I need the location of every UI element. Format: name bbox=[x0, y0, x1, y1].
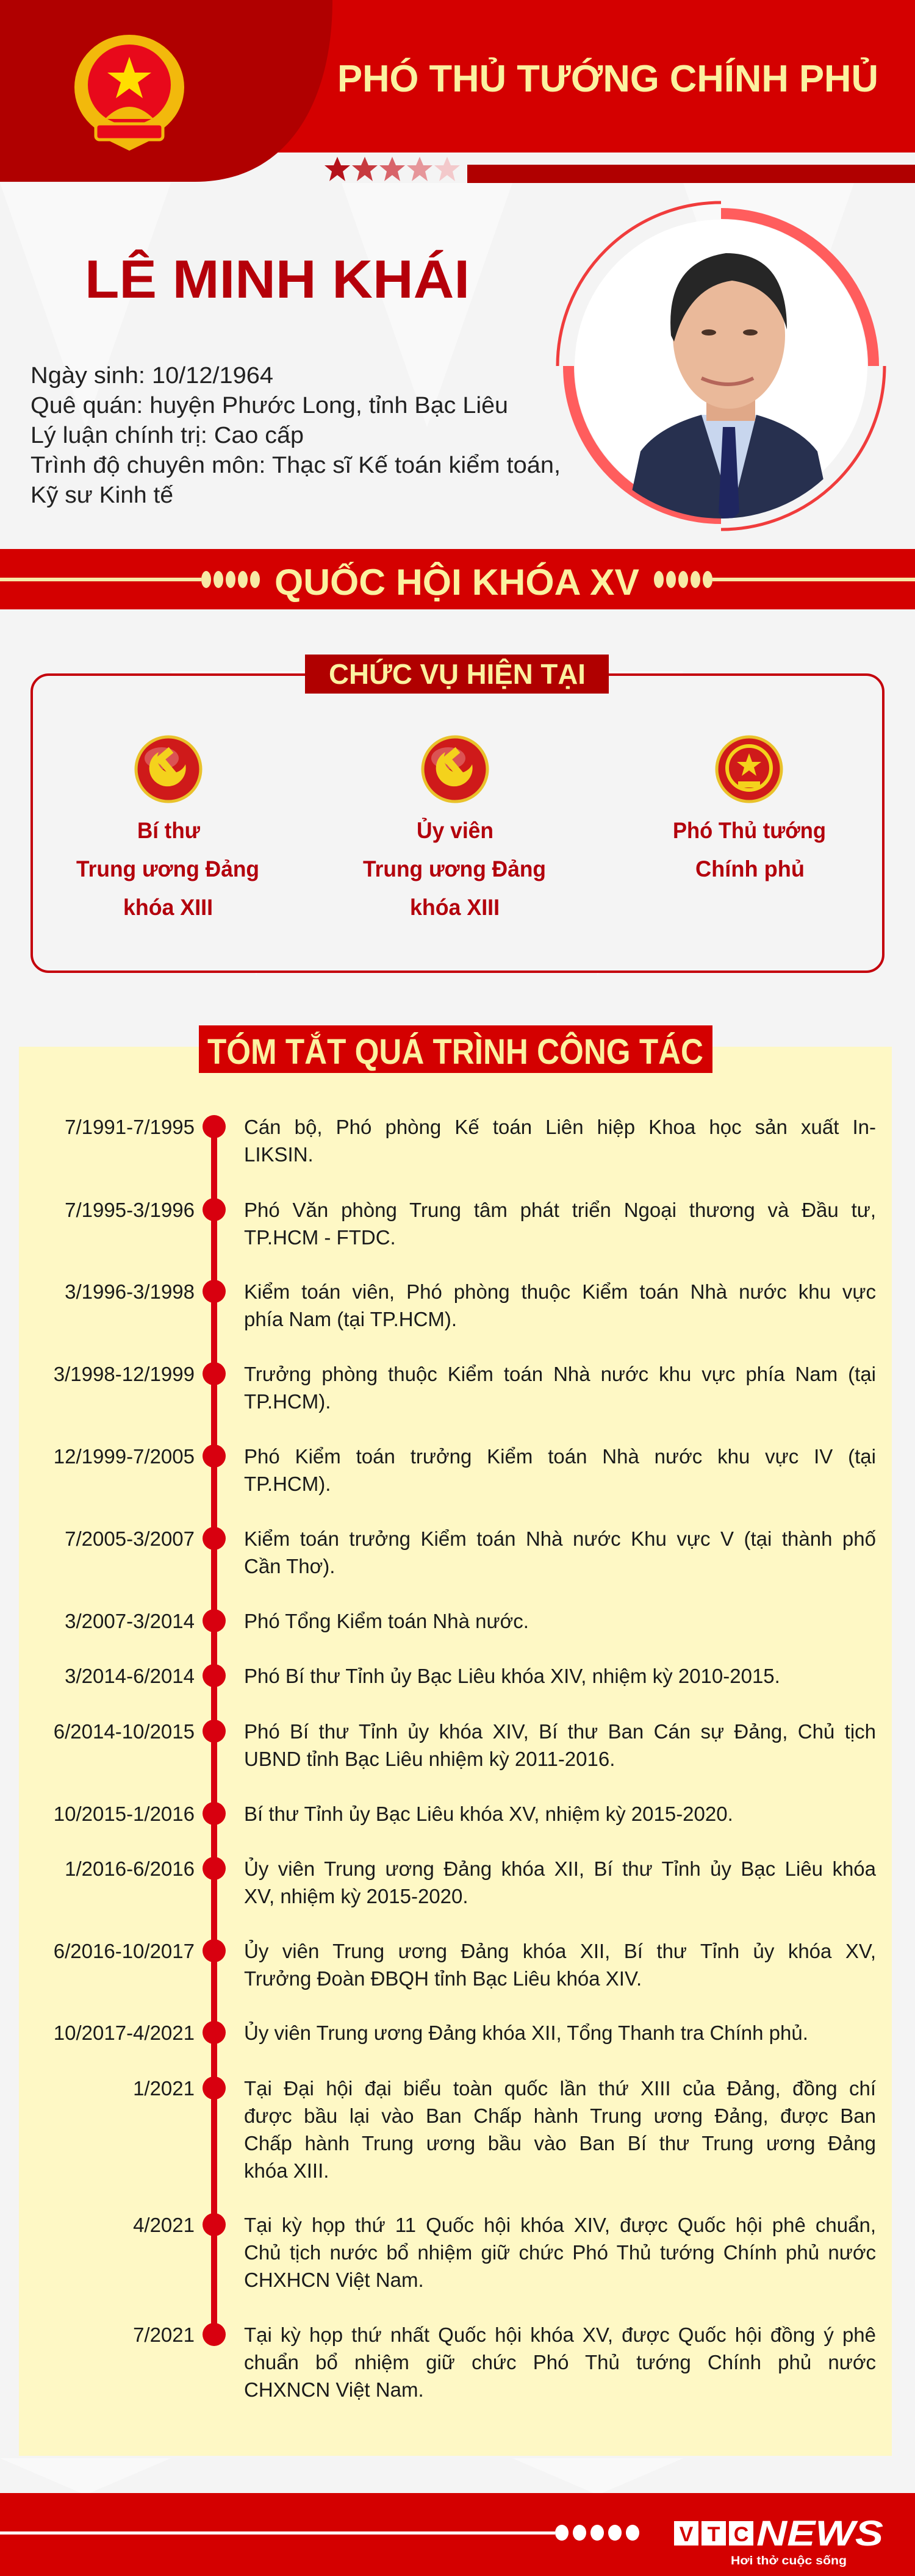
entry 7/2005: 7/2005-3/2007 bbox=[65, 1527, 195, 1550]
entry 4/2021 bbox=[133, 2213, 876, 2291]
panel: career timeline background bbox=[19, 1047, 892, 2456]
heading: chức vụ hiện tại: CHỨC VỤ HIỆN TẠI bbox=[329, 658, 586, 690]
panel: current positions bbox=[30, 655, 884, 973]
entry 3/1998: 3/1998-12/1999 bbox=[54, 1363, 195, 1385]
entry 3/2014: Phó Bí thư Tỉnh ủy Bạc Liêu khóa XIV, nhiệm kỳ 2010-2015. bbox=[244, 1665, 780, 1687]
entry 7/1991 bbox=[65, 1115, 876, 1166]
timeline entries: Chủ tịch nước bổ nhiệm giữ chức Phó Thủ tướng Chính phủ nước bbox=[244, 2241, 876, 2264]
logo: VTC News bbox=[674, 2514, 883, 2567]
logo: VTC News: V bbox=[680, 2523, 694, 2546]
timeline entries: Cần Thơ). bbox=[244, 1555, 335, 1577]
timeline entries: CHXNCN Việt Nam. bbox=[244, 2378, 424, 2401]
timeline entries: Chấp hành Trung ương bầu vào Ban Bí thư Trung ương Đảng bbox=[244, 2132, 876, 2154]
banner: Quốc hội khóa XV bbox=[0, 549, 915, 609]
icon: party emblem 1 bbox=[134, 736, 203, 803]
text: position 1 bbox=[76, 818, 259, 920]
entry 6/2014: Phó Bí thư Tỉnh ủy khóa XIV, Bí thư Ban Cán sự Đảng, Chủ tịch bbox=[244, 1720, 876, 1743]
logo: VTC News: Hơi thở cuộc sống bbox=[731, 2555, 847, 2567]
entry 1/2021: 1/2021 bbox=[133, 2077, 195, 2100]
entry 1/2021: Tại Đại hội đại biểu toàn quốc lần thứ XIII của Đảng, đồng chí bbox=[244, 2077, 876, 2100]
timeline entries: TP.HCM - FTDC. bbox=[244, 1226, 396, 1249]
entry 1/2021 bbox=[133, 2076, 876, 2182]
entry 1/2016 bbox=[65, 1857, 876, 1907]
timeline entries: TP.HCM). bbox=[244, 1473, 331, 1495]
text: position 2: Trung ương Đảng bbox=[363, 856, 546, 881]
stars rating bbox=[325, 157, 460, 181]
entry 12/1999: 12/1999-7/2005 bbox=[54, 1445, 195, 1468]
text: position 3: Chính phủ bbox=[695, 856, 805, 881]
personal info: Trình độ chuyên môn: Thạc sĩ Kế toán kiểm toán, bbox=[30, 453, 561, 478]
entry 7/1991: 7/1991-7/1995 bbox=[65, 1116, 195, 1138]
entry 12/1999 bbox=[54, 1444, 876, 1495]
icon: party emblem 2 bbox=[421, 736, 489, 803]
entry 6/2016: Ủy viên Trung ương Đảng khóa XII, Bí thư Tỉnh ủy khóa XV, bbox=[244, 1940, 876, 1962]
header band bbox=[0, 0, 915, 183]
timeline entries: LIKSIN. bbox=[244, 1143, 314, 1166]
entry 6/2016: 6/2016-10/2017 bbox=[54, 1940, 195, 1962]
logo: VTC News: T bbox=[708, 2523, 720, 2546]
personal info: Lý luận chính trị: Cao cấp bbox=[30, 423, 304, 448]
banner: Quốc hội khóa XV: QUỐC HỘI KHÓA XV bbox=[274, 562, 639, 603]
text: position 3 bbox=[673, 818, 826, 881]
personal info: Kỹ sư Kinh tế bbox=[30, 483, 173, 508]
entry 7/1995: 7/1995-3/1996 bbox=[65, 1199, 195, 1221]
entry 7/1995: Phó Văn phòng Trung tâm phát triển Ngoại thương và Đầu tư, bbox=[244, 1199, 876, 1221]
text: position 3: Phó Thủ tướng bbox=[673, 818, 826, 843]
timeline entries: khóa XIII. bbox=[244, 2159, 329, 2182]
entry 3/2007: Phó Tổng Kiểm toán Nhà nước. bbox=[244, 1610, 529, 1632]
timeline entries: UBND tỉnh Bạc Liêu nhiệm kỳ 2011-2016. bbox=[244, 1748, 615, 1770]
entry 7/2021: Tại kỳ họp thứ nhất Quốc hội khóa XV, được Quốc hội đồng ý phê bbox=[244, 2323, 876, 2346]
timeline line bbox=[211, 1127, 217, 2334]
entry 7/2021 bbox=[133, 2323, 876, 2401]
entry 3/1996 bbox=[65, 1280, 876, 1330]
entry 4/2021: 4/2021 bbox=[133, 2214, 195, 2236]
logo: VTC News: C bbox=[734, 2523, 748, 2546]
personal info bbox=[30, 363, 561, 508]
title: position: PHÓ THỦ TƯỚNG CHÍNH PHỦ bbox=[337, 58, 878, 100]
entry 4/2021: Tại kỳ họp thứ 11 Quốc hội khóa XIV, được Quốc hội phê chuẩn, bbox=[244, 2214, 876, 2236]
text: position 1: Trung ương Đảng bbox=[76, 856, 259, 881]
text: position 2: khóa XIII bbox=[410, 895, 500, 920]
entry 7/1991: Cán bộ, Phó phòng Kế toán Liên hiệp Khoa học sản xuất In- bbox=[244, 1116, 876, 1138]
entry 3/2007 bbox=[65, 1609, 529, 1632]
entry 6/2014: 6/2014-10/2015 bbox=[54, 1720, 195, 1743]
entry 10/2017: 10/2017-4/2021 bbox=[54, 2022, 195, 2044]
timeline entries: TP.HCM). bbox=[244, 1390, 331, 1413]
entry 1/2016: Ủy viên Trung ương Đảng khóa XII, Bí thư Tỉnh ủy Bạc Liêu khóa bbox=[244, 1857, 876, 1880]
timeline entries: Trưởng Đoàn ĐBQH tỉnh Bạc Liêu khóa XIV. bbox=[244, 1967, 642, 1990]
entry 6/2014 bbox=[54, 1720, 876, 1770]
icon: state emblem bbox=[715, 736, 783, 803]
text: position 2 bbox=[363, 817, 546, 920]
personal info: Quê quán: huyện Phước Long, tỉnh Bạc Liêu bbox=[30, 393, 508, 418]
logo: VTC News: NEWS bbox=[756, 2514, 883, 2553]
entry 3/1998: Trưởng phòng thuộc Kiểm toán Nhà nước khu vực phía Nam (tại bbox=[244, 1363, 876, 1385]
entry 3/2007: 3/2007-3/2014 bbox=[65, 1610, 195, 1632]
entry 3/1996: 3/1996-3/1998 bbox=[65, 1280, 195, 1303]
entry 10/2015: 10/2015-1/2016 bbox=[54, 1803, 195, 1825]
portrait photo bbox=[556, 201, 886, 531]
timeline entries: chuẩn bổ nhiệm giữ chức Phó Thủ tướng Chính phủ nước bbox=[244, 2351, 876, 2373]
entry 3/2014: 3/2014-6/2014 bbox=[65, 1665, 195, 1687]
text: position 1: Bí thư bbox=[137, 818, 200, 843]
text: position 1: khóa XIII bbox=[123, 895, 213, 920]
entry 12/1999: Phó Kiểm toán trưởng Kiểm toán Nhà nước khu vực IV (tại bbox=[244, 1445, 876, 1468]
heading: chức vụ hiện tại bbox=[305, 655, 609, 694]
entry 7/2005: Kiểm toán trưởng Kiểm toán Nhà nước Khu vực V (tại thành phố bbox=[244, 1527, 876, 1550]
entry 7/1995 bbox=[65, 1198, 876, 1249]
entry 3/1998 bbox=[54, 1363, 876, 1413]
entry 1/2016: 1/2016-6/2016 bbox=[65, 1857, 195, 1880]
footer bbox=[0, 2493, 915, 2576]
entry 3/1996: Kiểm toán viên, Phó phòng thuộc Kiểm toán Nhà nước khu vực bbox=[244, 1280, 876, 1303]
timeline entries: được bầu lại vào Ban Chấp hành Trung ương Đảng, được Ban bbox=[244, 2104, 876, 2127]
timeline entries: phía Nam (tại TP.HCM). bbox=[244, 1308, 457, 1330]
entry 7/2021: 7/2021 bbox=[133, 2323, 195, 2346]
entry 6/2016 bbox=[54, 1940, 876, 1990]
text: position 2: Ủy viên bbox=[417, 817, 493, 843]
entry 7/2005 bbox=[65, 1527, 876, 1577]
personal info: Ngày sinh: 10/12/1964 bbox=[30, 363, 273, 389]
timeline entries bbox=[54, 1115, 876, 2401]
timeline entries: XV, nhiệm kỳ 2015-2020. bbox=[244, 1885, 468, 1907]
entry 10/2015: Bí thư Tỉnh ủy Bạc Liêu khóa XV, nhiệm kỳ 2015-2020. bbox=[244, 1803, 733, 1825]
entry 10/2017: Ủy viên Trung ương Đảng khóa XII, Tổng Thanh tra Chính phủ. bbox=[244, 2022, 808, 2044]
timeline entries: CHXHCN Việt Nam. bbox=[244, 2269, 424, 2291]
icon: national emblem bbox=[74, 35, 184, 151]
